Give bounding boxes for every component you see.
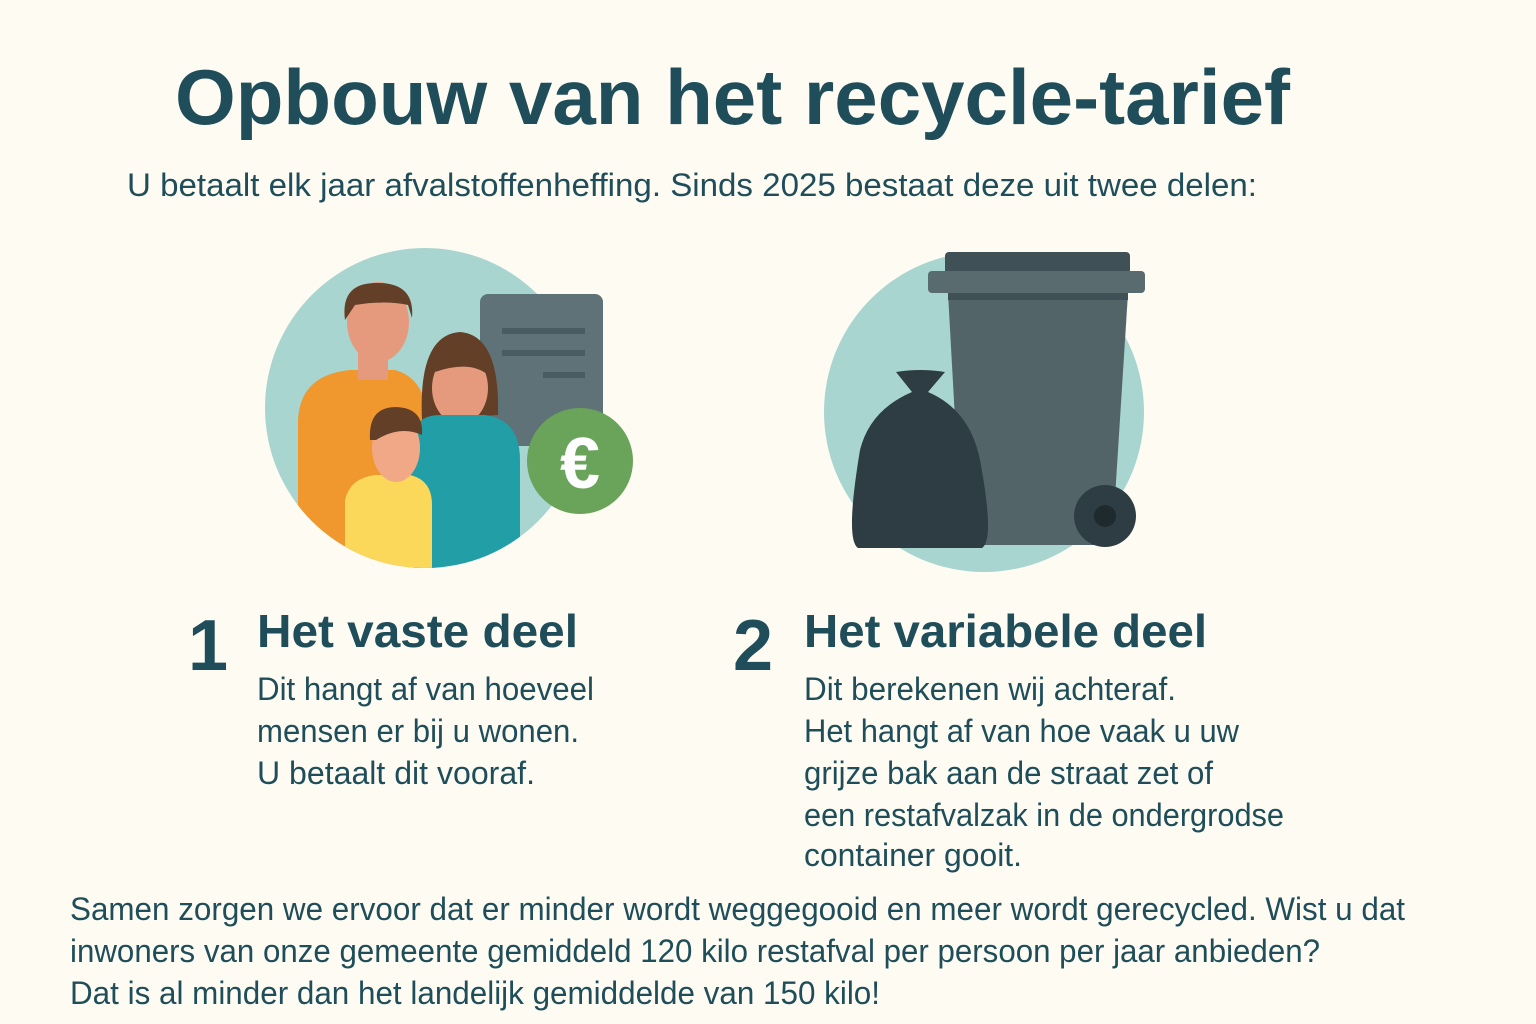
title: Opbouw van het recycle-tarief: [175, 53, 1291, 141]
icon: document: [480, 294, 603, 446]
section 1: 1: [188, 606, 228, 686]
section 2: Dit berekenen wij achteraf.: [804, 671, 1176, 707]
section 1: [188, 605, 594, 791]
subtitle: U betaalt elk jaar afvalstoffenheffing. Sinds 2025 bestaat deze uit twee delen:: [127, 167, 1257, 203]
bottom text: inwoners van onze gemeente gemiddeld 120 kilo restafval per persoon per jaar anbieden?: [70, 933, 1320, 969]
section 2: 2: [733, 606, 773, 686]
section 2: grijze bak aan de straat zet of: [804, 755, 1213, 791]
icon: euro coin: €: [560, 424, 600, 504]
icon: waste bin with bag: [824, 252, 1145, 572]
section 1: U betaalt dit vooraf.: [257, 755, 535, 791]
section 2: container gooit.: [804, 837, 1022, 873]
section 2: Het variabele deel: [804, 605, 1207, 657]
section 2: Het hangt af van hoe vaak u uw: [804, 713, 1240, 749]
section 1: Dit hangt af van hoeveel: [257, 671, 594, 707]
bottom text: Dat is al minder dan het landelijk gemiddelde van 150 kilo!: [70, 975, 880, 1011]
bottom text: [70, 891, 1405, 1011]
bottom text: Samen zorgen we ervoor dat er minder wordt weggegooid en meer wordt gerecycled. Wist u dat: [70, 891, 1405, 927]
section 1: Het vaste deel: [257, 605, 578, 657]
icon: euro coin: [527, 408, 633, 514]
icon: family with bill: [265, 248, 633, 580]
section 2: een restafvalzak in de ondergrodse: [804, 797, 1284, 833]
section 2: [733, 605, 1284, 873]
section 1: mensen er bij u wonen.: [257, 713, 579, 749]
